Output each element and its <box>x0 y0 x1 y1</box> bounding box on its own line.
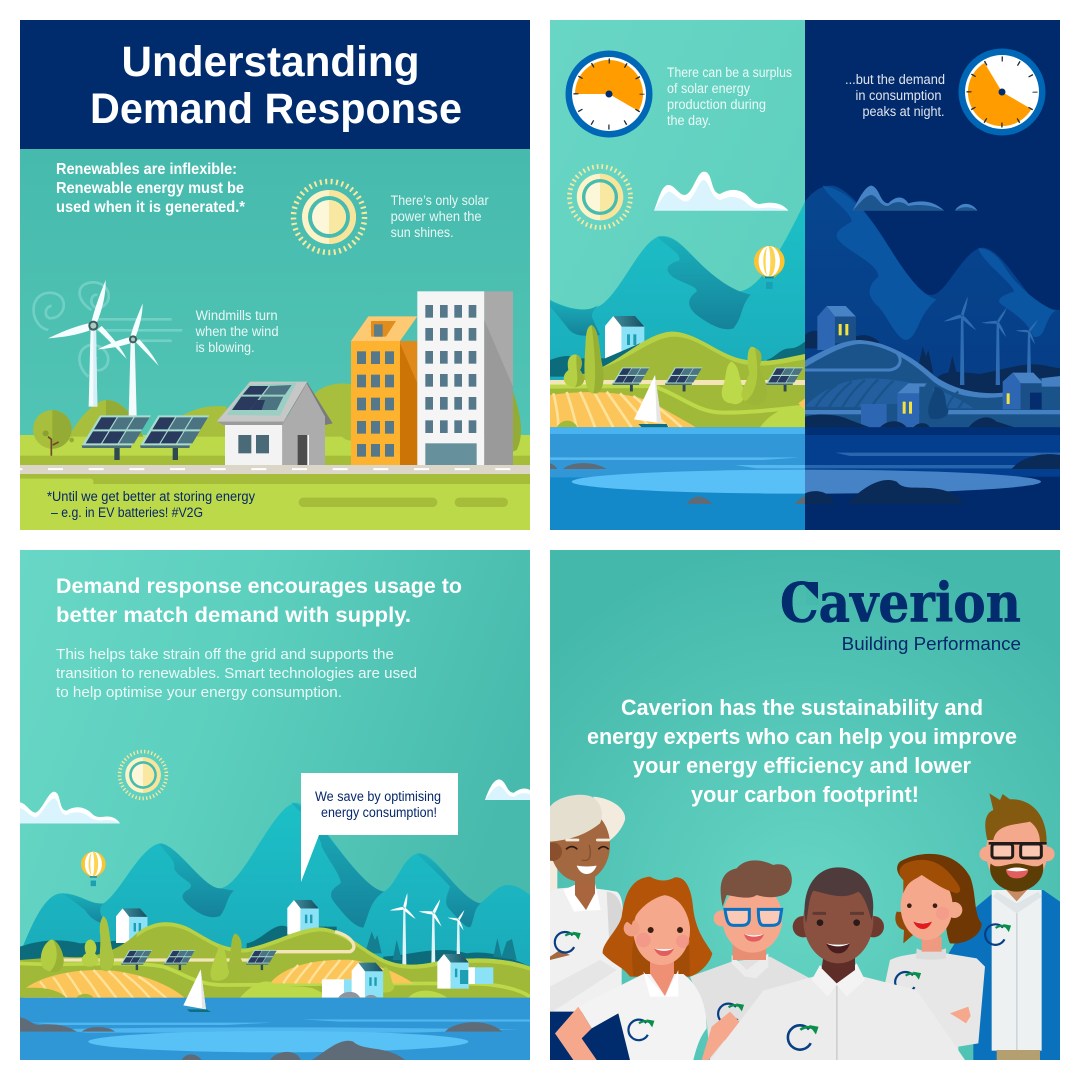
fields <box>20 960 447 998</box>
person: man with blue glasses <box>690 860 810 1060</box>
dark ridge <box>20 926 530 973</box>
balloon <box>81 852 106 886</box>
clock: day <box>566 50 652 138</box>
callout speech bubble <box>301 773 458 882</box>
wind turbines night <box>943 296 1043 385</box>
tree <box>33 410 74 460</box>
text: surplus of solar: of solar energy <box>667 81 750 96</box>
intro text: renewables are inflexible <box>56 161 246 216</box>
icon: sun day <box>569 166 631 228</box>
footnote <box>47 489 255 520</box>
title <box>90 39 462 133</box>
text: demand peaks at night <box>845 72 945 119</box>
landscape <box>20 779 530 1060</box>
ground <box>20 435 530 530</box>
statement: your carbon footprint! <box>691 782 919 807</box>
logo on shirt <box>628 1019 654 1040</box>
statement <box>587 695 1017 807</box>
illustration: wind, solar and buildings <box>7 280 530 530</box>
footnote: – e.g. in EV batteries! #V2G <box>51 505 203 520</box>
team of people <box>543 793 1060 1060</box>
water <box>20 998 530 1060</box>
logo on shirt <box>895 972 921 993</box>
tall white building <box>417 291 513 465</box>
hill night <box>805 340 1060 410</box>
text: demand peaks at night: in consumption <box>856 88 942 103</box>
icon: sun <box>120 752 166 798</box>
rocks <box>20 1017 502 1060</box>
rocks <box>550 463 805 504</box>
header banner <box>20 20 530 149</box>
callout speech bubble: energy consumption! <box>321 805 437 820</box>
logo on jacket shirt <box>985 924 1011 945</box>
heading: Demand response encourages usage to <box>56 575 462 598</box>
panel: understanding demand response <box>7 20 530 530</box>
text: surplus of solar <box>667 65 792 128</box>
text: windmills: is blowing. <box>196 340 255 355</box>
dark trees and ridge <box>805 331 1060 397</box>
trees <box>41 916 394 993</box>
sailboat <box>183 969 211 1012</box>
mountains <box>20 803 530 1000</box>
water <box>550 427 805 530</box>
house night centre <box>861 383 948 427</box>
text: demand peaks at night: peaks at night. <box>862 104 944 119</box>
panel: Caverion <box>543 550 1060 1060</box>
shore rocks night <box>805 414 1015 427</box>
text: solar power: There’s only solar <box>391 193 489 208</box>
logo partially hidden <box>718 1003 744 1024</box>
trees <box>564 325 768 405</box>
day scene <box>550 202 805 530</box>
person: woman with white hair <box>543 795 630 1060</box>
person: woman with arms crossed <box>885 854 985 1060</box>
sailboat <box>634 375 668 427</box>
wind turbine large <box>48 280 127 407</box>
wind turbine small <box>97 303 159 417</box>
text: windmills: Windmills turn <box>196 308 278 323</box>
title: Understanding <box>122 39 420 86</box>
heading: better match demand with supply. <box>56 604 411 627</box>
dark ridge <box>550 342 805 377</box>
logo: Caverion Building Performance: Caverion <box>780 570 1021 634</box>
logo: Caverion Building Performance: Building Performance <box>842 633 1021 654</box>
panel: day and night <box>550 20 1060 530</box>
low band <box>805 414 1060 427</box>
water night <box>870 427 1060 428</box>
logo on shirt <box>788 1025 819 1050</box>
text: solar power: power when the <box>391 209 482 224</box>
callout speech bubble: We save by optimising <box>315 789 441 804</box>
person: bearded man <box>947 793 1060 1060</box>
house <box>217 382 333 465</box>
text: solar power: sun shines. <box>391 225 454 240</box>
text: surplus of solar: production during <box>667 97 766 112</box>
title: Demand Response <box>90 86 462 133</box>
icon: sun <box>294 182 364 252</box>
icon: hot-air balloon <box>754 246 785 289</box>
intro text: renewables are inflexible: used when it is generated.* <box>56 199 246 216</box>
intro text: renewables are inflexible: Renewable energy must be <box>56 180 244 197</box>
hills <box>68 383 521 452</box>
field <box>550 392 696 427</box>
logo on shirt <box>555 932 581 953</box>
heading <box>56 575 462 627</box>
body text: This helps take strain off the grid and supports the <box>56 646 394 663</box>
body text <box>56 646 417 701</box>
text: surplus of solar: There can be a surplus <box>667 65 792 80</box>
text: surplus of solar: the day. <box>667 113 711 128</box>
solar panels <box>82 415 151 460</box>
rocks night <box>805 454 1060 504</box>
band and road <box>20 456 530 465</box>
green land <box>550 332 805 427</box>
night house <box>817 306 856 350</box>
wind swirls <box>34 282 182 377</box>
green land <box>20 922 530 998</box>
mountains night <box>805 186 1060 378</box>
houses back <box>116 908 147 943</box>
text: demand peaks at night: ...but the demand <box>845 72 945 87</box>
person: woman with red hair <box>555 877 743 1060</box>
solar panels <box>121 950 152 970</box>
body text: to help optimise your energy consumption. <box>56 684 342 701</box>
statement: Caverion has the sustainability and <box>621 695 983 720</box>
text: windmills <box>195 308 279 355</box>
clock: night <box>958 48 1046 136</box>
house night right <box>1003 373 1060 409</box>
body text: transition to renewables. Smart technologies are used <box>56 665 417 682</box>
footnote: *Until we get better at storing energy <box>47 489 255 504</box>
solar panels <box>612 367 650 391</box>
cloud day <box>654 172 788 211</box>
text: windmills: when the wind <box>195 324 279 339</box>
shore rocks <box>338 992 377 998</box>
panel: demand response explanation <box>20 550 530 1060</box>
person: central man <box>710 867 965 1060</box>
wind turbines <box>390 893 470 965</box>
orange building <box>351 316 417 465</box>
cloud night <box>853 186 977 211</box>
house <box>605 316 644 359</box>
front houses <box>322 954 493 998</box>
statement: energy experts who can help you improve <box>587 724 1017 749</box>
mountains day <box>550 202 805 380</box>
night scene <box>805 186 1060 504</box>
statement: your energy efficiency and lower <box>633 753 971 778</box>
text: solar power <box>391 193 489 240</box>
clouds <box>20 779 530 823</box>
intro text: renewables are inflexible: Renewables are inflexible: <box>56 161 237 178</box>
